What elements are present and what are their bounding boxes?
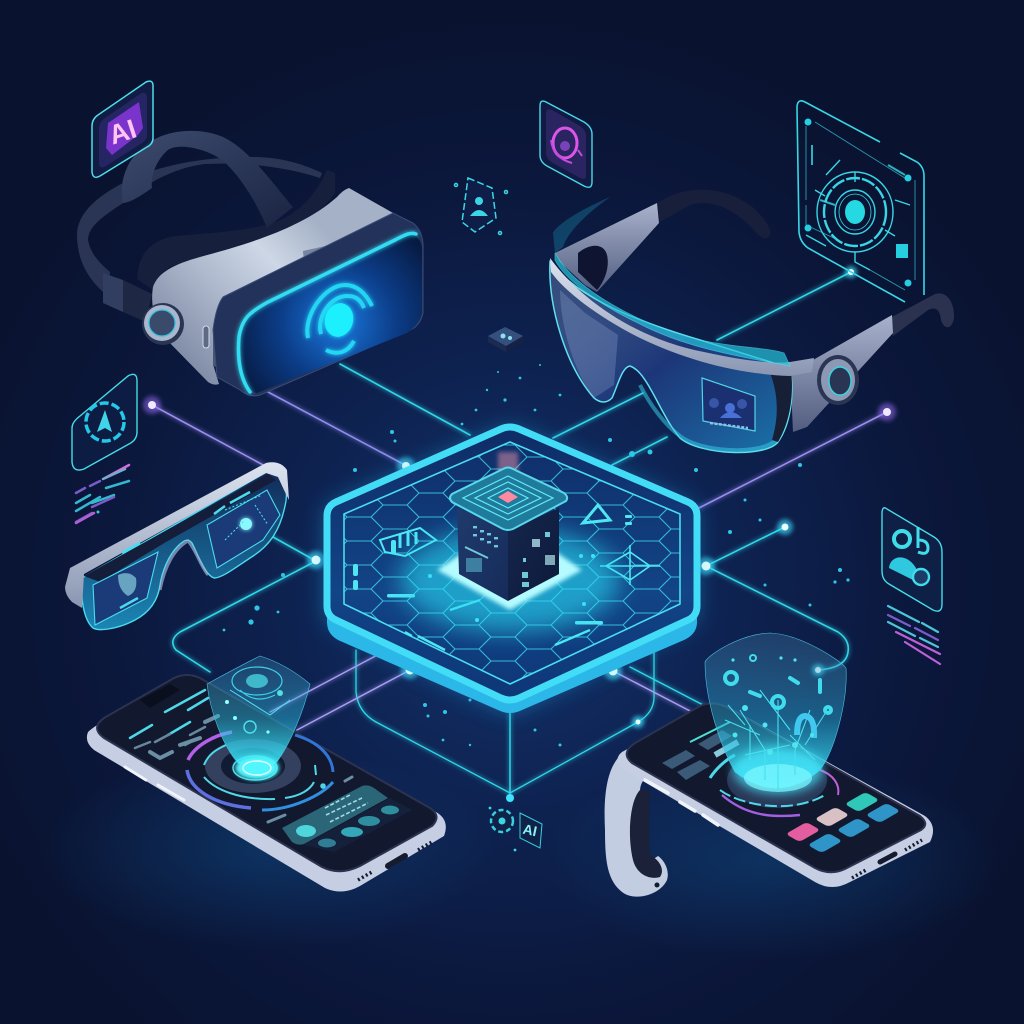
front bezel <box>213 213 423 396</box>
rear strap clip <box>103 273 123 312</box>
platform circuit glyphs <box>353 505 660 650</box>
lens body <box>82 470 286 630</box>
AI badge icon <box>92 81 153 177</box>
lens right shadow <box>768 368 792 442</box>
cyan shield <box>555 253 790 366</box>
cube left face <box>457 508 508 601</box>
AI label: AI <box>521 821 539 839</box>
lens display <box>702 378 755 431</box>
nose bridge pads <box>160 541 208 590</box>
lens displays <box>93 490 280 625</box>
smart visor glasses <box>550 190 954 453</box>
radial dial <box>710 752 838 816</box>
central glow pad <box>400 520 620 632</box>
right smartphone <box>617 633 933 887</box>
silver shell <box>152 188 393 385</box>
central hexagon platform <box>327 427 697 713</box>
phone body <box>617 704 933 887</box>
right temple <box>790 315 893 432</box>
small user icon <box>454 178 508 234</box>
VR headset <box>77 131 423 396</box>
lid core <box>498 491 518 503</box>
visor target icon <box>307 285 372 353</box>
info panel <box>282 785 412 852</box>
phone body <box>87 676 446 892</box>
head band <box>77 157 322 296</box>
charging port and speakers <box>358 842 432 880</box>
floating HUD panel <box>797 101 924 302</box>
user profile icon <box>882 508 942 611</box>
connection lines <box>152 272 887 800</box>
cube side details <box>465 526 555 587</box>
radial dial <box>187 732 333 810</box>
temple opening <box>578 246 608 290</box>
phone edge buttons <box>645 780 718 825</box>
side buttons <box>203 326 222 368</box>
floating particles <box>223 364 850 746</box>
small floating chip <box>488 327 523 352</box>
right status lines <box>888 606 940 664</box>
frame bar <box>65 462 289 608</box>
left status lines <box>76 465 129 523</box>
platform inner border <box>344 442 680 684</box>
screen list items <box>130 690 352 822</box>
hologram cup <box>705 633 846 794</box>
screen widgets <box>662 722 738 780</box>
cube right face <box>508 508 559 601</box>
hud dial <box>806 160 910 270</box>
band inner padding <box>137 170 335 290</box>
visor <box>240 233 422 393</box>
wrist band <box>605 750 668 897</box>
phone screen <box>627 703 925 872</box>
platform top face <box>327 427 697 700</box>
AI label: AI <box>105 114 140 150</box>
temple knob <box>817 355 859 405</box>
phone screen <box>97 675 437 871</box>
top vent <box>303 245 349 268</box>
top strap <box>122 131 293 228</box>
shield top fade <box>553 197 610 253</box>
phone edge buttons <box>125 767 184 800</box>
side knob <box>142 303 184 345</box>
charging port and speakers <box>852 840 922 878</box>
silver brow band <box>550 258 814 376</box>
bottom AI emblem <box>489 807 542 851</box>
hologram cone <box>207 656 310 780</box>
visor neon rim <box>238 233 416 392</box>
phone notch <box>140 684 180 708</box>
app tiles <box>786 792 900 853</box>
cube lid <box>450 468 567 530</box>
left temple <box>555 203 659 292</box>
visor lens <box>550 262 792 453</box>
lens reflection <box>560 290 618 398</box>
platform side <box>327 520 697 713</box>
lid concentric squares <box>463 476 553 520</box>
connection nodes <box>143 266 896 802</box>
platform outer glow <box>327 428 695 712</box>
hud frame <box>806 122 915 290</box>
left temple arm <box>657 190 770 238</box>
dark under-bar <box>84 474 276 582</box>
purple ring icon <box>540 101 592 187</box>
hologram beam <box>498 452 518 490</box>
lens bright rim <box>640 385 776 450</box>
left smartphone <box>87 656 446 892</box>
right arm <box>890 293 954 336</box>
AI core cube <box>450 452 567 601</box>
navigation icon <box>72 374 137 470</box>
left smart glasses <box>65 462 289 630</box>
